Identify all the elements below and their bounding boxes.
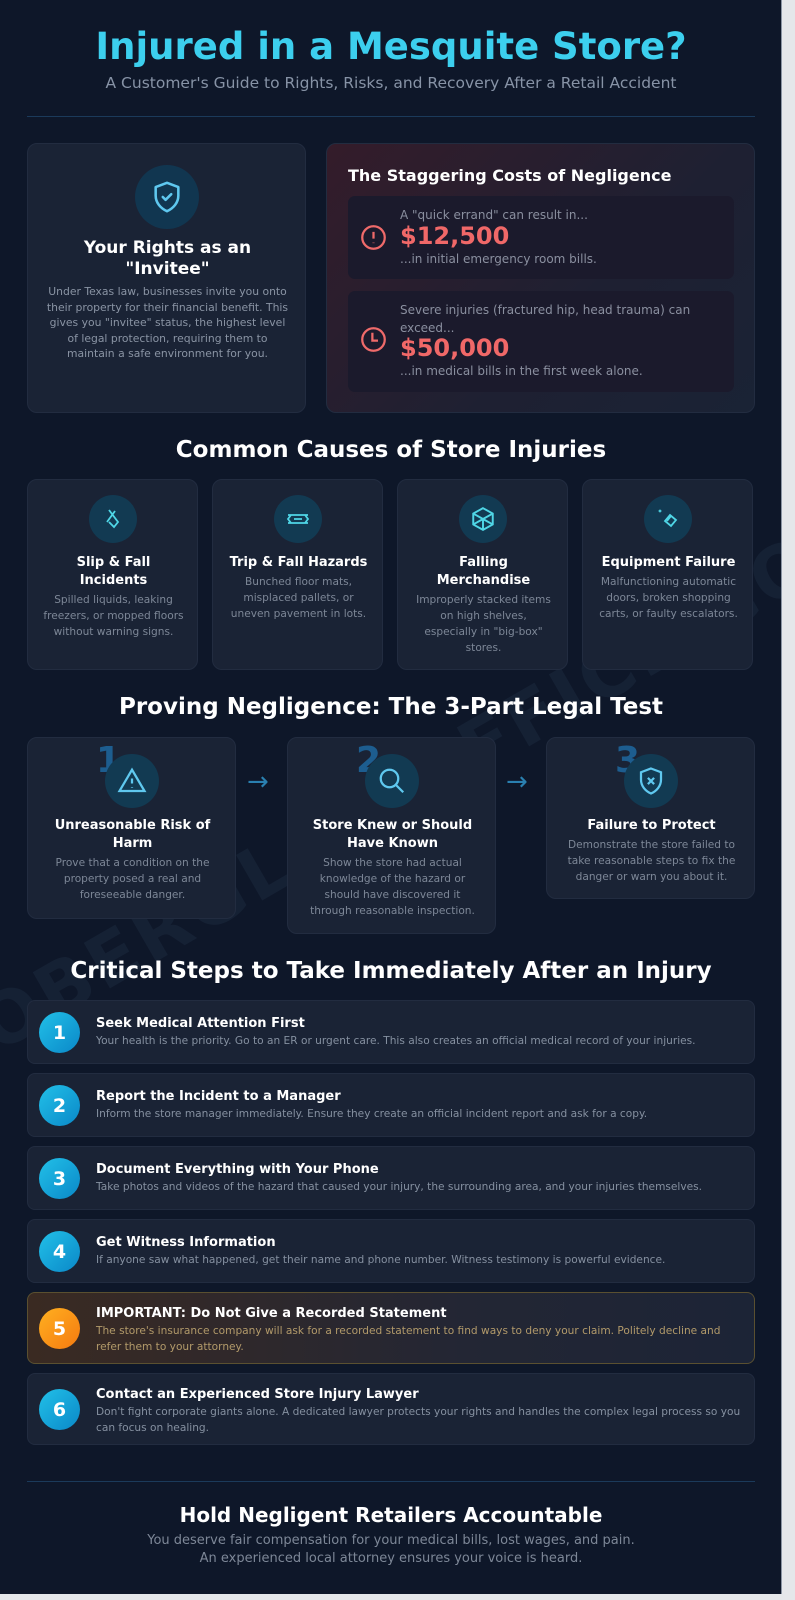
cause: slip: Spilled liquids, leaking freezers, or mopped floors without warning signs.	[43, 594, 184, 638]
step 1	[27, 737, 236, 919]
step 1: 1	[96, 740, 121, 781]
step 4: 4	[53, 1240, 66, 1262]
panel: costs	[326, 143, 755, 413]
heading: causes: Common Causes of Store Injuries	[176, 437, 606, 463]
step 2: 2	[53, 1094, 66, 1116]
cause: slip	[27, 479, 198, 670]
icon: clock	[361, 327, 386, 352]
step 1: 1	[53, 1022, 66, 1044]
cost 2: Severe injuries (fractured hip, head trauma) can exceed...	[400, 303, 690, 335]
step 4: If anyone saw what happened, get their name and phone number. Witness testimony is powerful evidence.	[96, 1254, 665, 1266]
cause: equipment: Malfunctioning automatic doors, broken shopping carts, or faulty escalators.	[599, 576, 738, 620]
step 1: Your health is the priority. Go to an ER or urgent care. This also creates an official medical record of your injuries.	[96, 1035, 696, 1047]
arrow: →	[247, 767, 269, 797]
step 2: Store Knew or Should	[313, 818, 472, 833]
cost 2: $50,000	[400, 334, 509, 362]
cause: merchandise: Falling	[459, 555, 508, 570]
icon: shield	[135, 165, 199, 229]
cost 1: ...in initial emergency room bills.	[400, 252, 597, 266]
step 2: Have Known	[347, 836, 438, 851]
step 6	[27, 1373, 755, 1445]
step 6: Don't fight corporate giants alone. A dedicated lawyer protects your rights and handles the complex legal process so you can focus on healing.	[96, 1406, 740, 1434]
step 1: Unreasonable Risk of	[55, 818, 210, 833]
step 3: Document Everything with Your Phone	[96, 1162, 379, 1177]
step 5: important: The store's insurance company will ask for a recorded statement to find ways to deny your claim. Politely decline and refer them to your attorney.	[96, 1325, 720, 1353]
step 6: Contact an Experienced Store Injury Lawyer	[96, 1387, 419, 1402]
cost 1: $12,500	[400, 222, 509, 250]
step 6: 6	[53, 1398, 66, 1420]
cause: merchandise: Merchandise	[437, 573, 530, 588]
step 2	[27, 1073, 755, 1137]
text: Under Texas law, businesses invite you onto their property for their financial benefit. This gives you "invitee" status, the highest level of legal protection, requiring them to maintain a safe environment for you.	[47, 285, 288, 360]
footer text: An experienced local attorney ensures your voice is heard.	[200, 1551, 582, 1566]
step 4	[27, 1219, 755, 1283]
cause: trip	[212, 479, 383, 670]
step 3: 3	[53, 1168, 66, 1190]
cause: merchandise: Improperly stacked items on high shelves, especially in "big-box" stores.	[416, 594, 551, 654]
heading: Your Rights as an	[84, 238, 251, 258]
subtitle: A Customer's Guide to Rights, Risks, and Recovery After a Retail Accident	[106, 74, 676, 92]
heading: "Invitee"	[125, 259, 210, 279]
arrow: →	[506, 767, 528, 797]
step 3: Demonstrate the store failed to take reasonable steps to fix the danger or warn you about it.	[568, 839, 735, 883]
heading: critical steps: Critical Steps to Take Immediately After an Injury	[70, 958, 712, 984]
step 5: important	[27, 1292, 755, 1364]
cause: trip: Trip & Fall Hazards	[230, 555, 367, 570]
cause: equipment	[582, 479, 753, 670]
step 4: Get Witness Information	[96, 1235, 276, 1250]
footer text: You deserve fair compensation for your medical bills, lost wages, and pain.	[147, 1533, 635, 1548]
step 2: 2	[356, 740, 381, 781]
panel: legal test	[27, 737, 755, 934]
panel: rights	[27, 143, 306, 413]
cause: trip: Bunched floor mats, misplaced pallets, or uneven pavement in lots.	[231, 576, 366, 620]
step 5: important: IMPORTANT: Do Not Give a Recorded Statement	[96, 1306, 447, 1321]
cost 2: ...in medical bills in the first week alone.	[400, 364, 643, 378]
cause: equipment: Equipment Failure	[602, 555, 735, 570]
step 1: Harm	[113, 836, 152, 851]
footer heading: Hold Negligent Retailers Accountable	[180, 1503, 602, 1527]
step 3: 3	[615, 740, 640, 781]
step 3	[27, 1146, 755, 1210]
heading: The Staggering Costs of Negligence	[348, 166, 671, 185]
step 1	[27, 1000, 755, 1064]
step 3: Take photos and videos of the hazard that caused your injury, the surrounding area, and your injuries themselves.	[96, 1181, 702, 1193]
step 2: Report the Incident to a Manager	[96, 1089, 341, 1104]
title: Injured in a Mesquite Store?	[95, 25, 687, 68]
cost 1: A "quick errand" can result in...	[400, 208, 588, 222]
panel: causes	[27, 479, 753, 670]
heading: legal test: Proving Negligence: The 3-Part Legal Test	[119, 694, 663, 720]
step 3: Failure to Protect	[587, 818, 716, 833]
cause: slip: Incidents	[80, 573, 147, 588]
footer text	[147, 1533, 635, 1566]
cost 2	[348, 291, 734, 392]
cause: slip: Slip & Fall	[77, 555, 150, 570]
step 2: Inform the store manager immediately. Ensure they create an official incident report and ask for a copy.	[96, 1108, 647, 1120]
step 2	[287, 737, 496, 934]
step 1: Seek Medical Attention First	[96, 1016, 305, 1031]
step 1: Prove that a condition on the property posed a real and foreseeable danger.	[56, 857, 210, 901]
heading	[84, 238, 251, 279]
step 2: Show the store had actual knowledge of the hazard or should have discovered it through reasonable inspection.	[310, 857, 475, 917]
cost 1	[348, 196, 734, 279]
step 5: important: 5	[53, 1318, 66, 1340]
cause: merchandise	[397, 479, 568, 670]
icon: alert	[361, 225, 386, 250]
step 3	[546, 737, 755, 899]
